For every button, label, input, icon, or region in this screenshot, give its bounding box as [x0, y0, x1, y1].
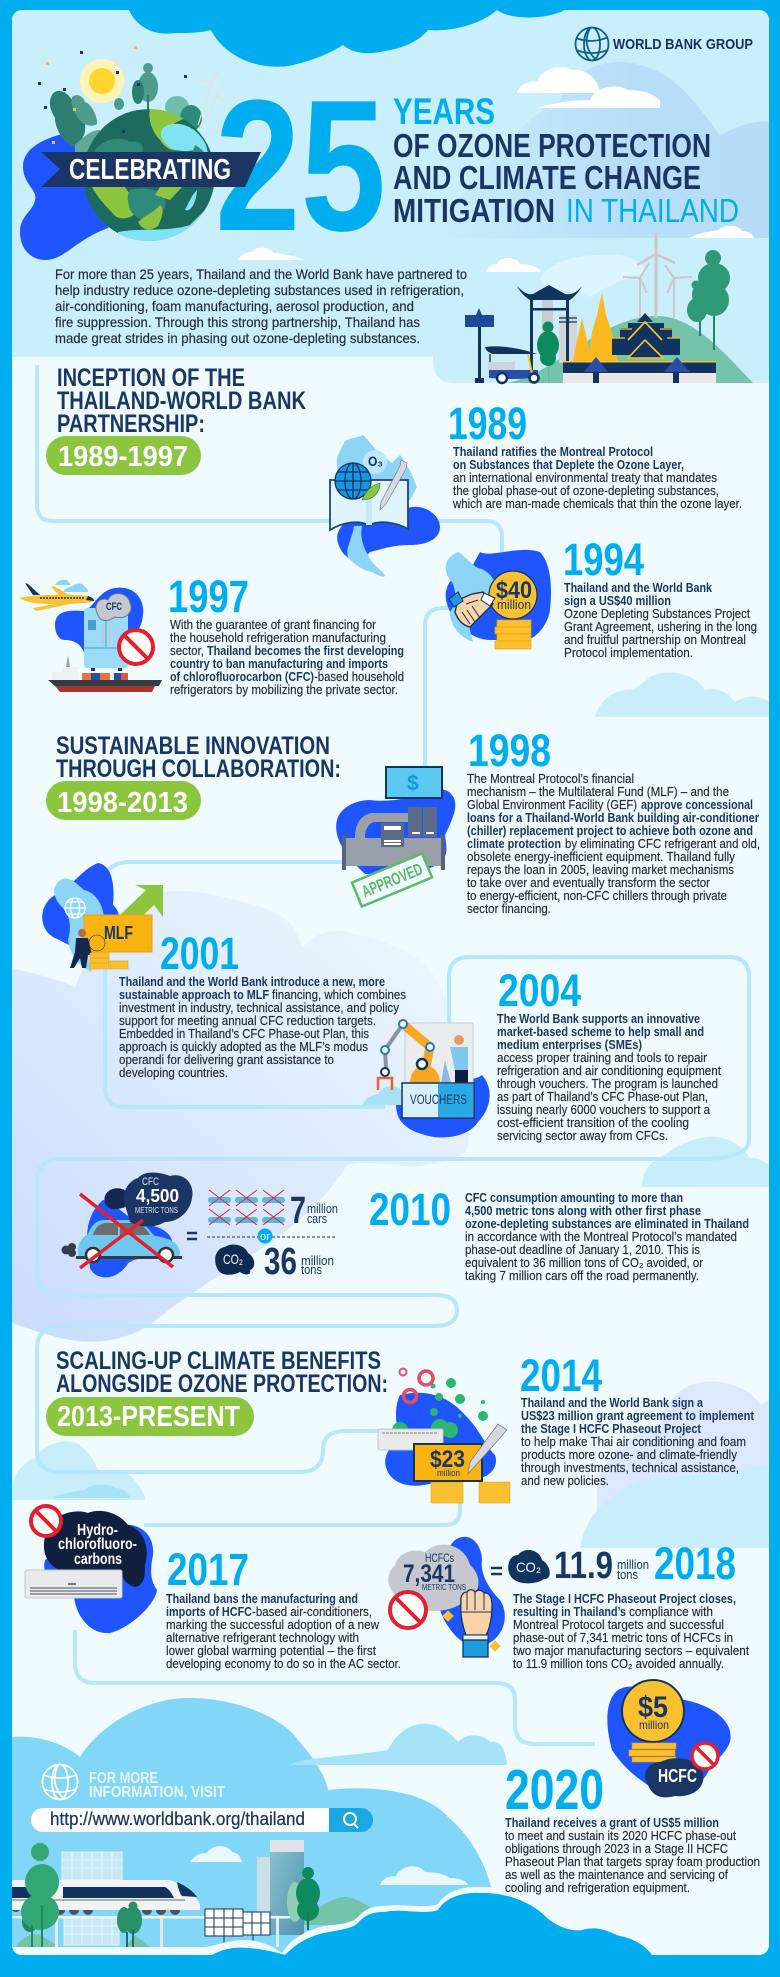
lavender cloud left	[12, 891, 469, 1342]
co2 figure: 11.9	[554, 1545, 613, 1587]
ship	[48, 655, 162, 692]
milestone 2018: compliance with	[629, 1605, 713, 1619]
equals	[491, 1568, 502, 1574]
tuk-tuk	[485, 346, 538, 383]
icon: vouchers	[363, 1020, 490, 1137]
milestone 1989: 1989	[448, 398, 527, 449]
cfc smoke: CFC	[106, 601, 122, 613]
sun	[80, 59, 124, 103]
milestone 2001	[119, 928, 406, 1080]
milestone 2018	[513, 1538, 749, 1671]
milestone 1989: an international environmental treaty that mandates	[453, 471, 717, 485]
green arrow	[118, 885, 163, 928]
cfc cloud: METRIC TONS	[135, 1206, 178, 1215]
city and skytrain illustration	[12, 1840, 468, 1947]
milestone 2018: phase-out of 7,341 metric tons of HCFCs in	[513, 1631, 733, 1645]
seven million cars: cars	[307, 1211, 327, 1226]
milestone 2014: and new policies.	[521, 1474, 609, 1488]
blob	[42, 863, 120, 953]
milestone 1998: Global Environment Facility (GEF)	[467, 798, 637, 812]
pen	[380, 460, 407, 510]
milestone 1998: repays the loan in 2005, leaving market mechanisms	[467, 863, 734, 877]
heading: scaling-up: SCALING-UP CLIMATE BENEFITS	[56, 1347, 381, 1375]
seven million cars	[208, 1190, 338, 1232]
top cloud	[129, 10, 565, 67]
milestone 2004: market-based scheme to help small and	[497, 1025, 704, 1039]
milestone 2004: access proper training and tools to repair	[497, 1051, 707, 1065]
blob	[385, 1393, 496, 1486]
small dark cloud	[104, 1188, 128, 1209]
green dots	[392, 1378, 488, 1438]
milestone 1997: refrigerators by mobilizing the private sector.	[170, 683, 398, 697]
milestone 2004	[497, 965, 721, 1143]
grant sign: million	[437, 1468, 460, 1478]
blob	[337, 507, 440, 560]
equals	[187, 1233, 197, 1239]
heading: inception: THAILAND-WORLD BANK	[57, 387, 306, 415]
heading: sustainable innovation: THROUGH COLLABORATION:	[56, 755, 341, 783]
pale cloud behind landmarks	[540, 254, 647, 297]
heading: sustainable innovation	[56, 732, 341, 783]
milestone 2010	[369, 1184, 749, 1283]
milestone 1997: the household refrigeration manufacturing	[170, 631, 386, 645]
no sign	[31, 1506, 61, 1536]
leaf	[362, 483, 380, 500]
heading: scaling-up	[56, 1347, 388, 1398]
hcfc label: chlorofluoro-	[58, 1536, 137, 1553]
milestone 2020	[505, 1758, 760, 1895]
milestone 2017: alternative refrigerant technology with	[166, 1631, 359, 1645]
milestone 2020: cooling and refrigeration equipment.	[505, 1881, 690, 1895]
milestone 2010: in accordance with the Montreal Protocol’s mandated	[465, 1230, 737, 1244]
cfc cloud: CFC	[142, 1176, 159, 1188]
earth illustration	[20, 46, 225, 260]
trees behind earth	[50, 63, 202, 152]
milestone 2020: as well as the maintenance and servicing of	[505, 1868, 728, 1882]
robot base	[378, 1020, 440, 1090]
coin: million	[639, 1718, 669, 1732]
red cross	[80, 1194, 173, 1268]
milestone 1997: With the guarantee of grant financing for	[170, 618, 376, 632]
intro text: For more than 25 years, Thailand and the World Bank have partnered to	[55, 266, 467, 282]
co2 36 million tons	[215, 1241, 334, 1283]
milestone 2014: to help make Thai air conditioning and foam	[521, 1435, 746, 1449]
milestone 2014: US$23 million grant agreement to implement	[521, 1409, 755, 1423]
blob	[55, 588, 143, 655]
train	[12, 1880, 294, 1947]
milestone 1997	[168, 571, 404, 697]
milestone 1997: 1997	[168, 571, 249, 622]
milestone 2004: medium enterprises (SMEs)	[497, 1038, 642, 1052]
blob	[396, 1075, 490, 1137]
lavender cloud right	[597, 1381, 769, 1510]
blob	[44, 1525, 157, 1633]
cloud right of 1994	[595, 672, 769, 717]
panel	[405, 1023, 473, 1083]
milestone 2010: CFC consumption amounting to more than	[465, 1191, 683, 1205]
milestone 2004: through vouchers. The program is launched	[497, 1077, 718, 1091]
milestone 2001: operandi for delivering grant assistance to	[119, 1053, 334, 1067]
date pill: 2013-present: 2013-PRESENT	[57, 1401, 240, 1433]
milestone 2001: Embedded in Thailand’s CFC Phase-out Plan, this	[119, 1027, 369, 1041]
title	[393, 91, 739, 229]
search bar: http://www.worldbank.org/thailand	[50, 1809, 305, 1829]
milestone 2018: two major manufacturing sectors – equivalent	[513, 1644, 749, 1658]
or divider: or	[260, 1231, 270, 1243]
ribbon: celebrating: CELEBRATING	[69, 154, 231, 186]
co2 figure	[508, 1545, 649, 1587]
milestone 1994: Thailand and the World Bank	[564, 581, 713, 595]
hills	[15, 1897, 395, 1947]
milestone 2001: financing, which combines	[272, 988, 406, 1002]
search icon	[344, 1813, 358, 1828]
cfc cloud: 4,500	[136, 1186, 179, 1206]
milestone 2004: 2004	[498, 965, 581, 1016]
tree right	[687, 250, 730, 350]
milestone 1997: sector,	[170, 644, 204, 658]
co2 figure: CO₂	[516, 1559, 541, 1575]
grey cloud	[388, 1545, 478, 1611]
grid building	[205, 1909, 270, 1944]
milestone 2001: investment in industry, technical assistance, and policy	[119, 1001, 400, 1015]
milestone 2010: 4,500 metric tons along with other first phase	[465, 1204, 701, 1218]
search bar	[31, 1808, 373, 1832]
visit text	[89, 1770, 225, 1801]
intro text: made great strides in phasing out ozone-depleting substances.	[55, 330, 420, 346]
milestone 1998: obsolete energy-inefficient equipment. Thailand fully	[467, 850, 736, 864]
cloud bottom left of section three	[12, 1441, 145, 1500]
visit text: INFORMATION, VISIT	[89, 1784, 225, 1801]
ozone label: O₃	[368, 453, 383, 469]
milestone 2001: sustainable approach to MLF	[119, 988, 269, 1002]
coin	[489, 571, 537, 619]
voucher: VOUCHERS	[410, 1091, 467, 1107]
or divider	[207, 1228, 335, 1244]
milestone 2020: obligations through 2023 in a Stage II HCFC	[505, 1842, 728, 1856]
milestone 2001: Thailand and the World Bank introduce a new, more	[119, 975, 385, 989]
blue blob	[20, 134, 150, 260]
milestone 2017: lower global warming potential – the first	[166, 1644, 376, 1658]
intro text	[55, 266, 467, 346]
title: IN THAILAND	[566, 192, 739, 229]
confetti dots	[38, 51, 187, 133]
blob	[446, 550, 551, 640]
milestone 2017: -based air-conditioners,	[252, 1605, 372, 1619]
milestone 2017: 2017	[167, 1544, 249, 1595]
hill	[507, 316, 753, 383]
background hills	[430, 62, 769, 238]
airplane	[19, 583, 94, 611]
milestone 2018: 2018	[654, 1538, 736, 1589]
no sign	[692, 1743, 718, 1769]
white foreground cloud	[12, 1887, 656, 1955]
coin	[622, 1680, 684, 1742]
robot arm	[385, 1024, 430, 1082]
car icons	[208, 1197, 285, 1223]
small cloud	[363, 1086, 403, 1105]
milestone 2014: Thailand and the World Bank sign a	[521, 1396, 704, 1410]
lamp post	[465, 308, 494, 383]
blue cloud right	[580, 1465, 769, 1548]
stacks	[542, 298, 577, 363]
co2 36 million tons: million	[301, 1253, 334, 1268]
title: AND CLIMATE CHANGE	[393, 159, 701, 196]
hcfc figures	[403, 1551, 466, 1592]
coin: $40	[496, 577, 532, 604]
milestone 2017: Thailand bans the manufacturing and	[166, 1592, 358, 1606]
hcfc figures: METRIC TONS	[422, 1583, 466, 1592]
milestone 1994: 1994	[563, 534, 644, 585]
title: MITIGATION	[393, 192, 555, 229]
milestone 2020: Thailand receives a grant of US$5 million	[505, 1816, 719, 1830]
date pill: 1998-2013: 1998-2013	[57, 787, 188, 819]
heading: scaling-up: ALONGSIDE OZONE PROTECTION:	[56, 1370, 388, 1398]
milestone 1989	[448, 398, 742, 511]
milestone 1998: climate protection	[467, 837, 561, 851]
wind turbines	[197, 68, 225, 130]
milestone 2018: to 11.9 million tons CO₂ avoided annually.	[513, 1657, 724, 1671]
bubbles	[400, 1368, 433, 1402]
milestone 2010: taking 7 million cars off the road permanently.	[465, 1269, 699, 1283]
milestone 1998: 1998	[468, 725, 551, 776]
icon: cfc refrigerator ban	[19, 580, 162, 692]
co2 36 million tons: 36	[264, 1241, 297, 1283]
seven million cars: 7	[290, 1190, 306, 1232]
blob	[607, 1687, 731, 1792]
milestone 2001: 2001	[160, 928, 239, 979]
hcfc label: carbons	[74, 1551, 122, 1568]
trees	[21, 1843, 320, 1947]
businessman	[70, 929, 92, 968]
blob	[436, 1537, 505, 1647]
icon: montreal protocol book	[330, 435, 440, 577]
milestone 2004: refrigeration and air conditioning equipment	[497, 1064, 721, 1078]
milestone 2017: imports of HCFC	[166, 1605, 252, 1619]
sparkles	[442, 1610, 501, 1652]
milestone 2004: cost-efficient transition of the cooling	[497, 1116, 689, 1130]
milestone 1994: sign a US$40 million	[564, 594, 671, 608]
milestone 2004: The World Bank supports an innovative	[497, 1012, 700, 1026]
man with tablet	[441, 1035, 468, 1083]
milestone 2004: issuing nearly 6000 vouchers to support a	[497, 1103, 710, 1117]
milestone 1989: the global phase-out of ozone-depleting substances,	[453, 484, 719, 498]
icon: hcfc ban	[25, 1506, 157, 1633]
milestone 2004: servicing sector away from CFCs.	[497, 1129, 668, 1143]
milestone 1997: Thailand becomes the first developing	[207, 644, 404, 658]
map of thailand	[446, 552, 498, 642]
coins	[89, 935, 128, 969]
milestone 2018: resulting in Thailand’s	[513, 1605, 626, 1619]
header background	[12, 10, 769, 383]
icon: cfc car equivalence	[62, 1172, 338, 1283]
intro text: fire suppression. Through this strong partnership, Thailand has	[55, 314, 420, 330]
logo text: WORLD BANK GROUP	[613, 36, 753, 53]
milestone 1998: The Montreal Protocol’s financial	[467, 772, 634, 786]
ozone bubble	[363, 450, 387, 474]
milestone 2014	[520, 1350, 755, 1488]
intro text: help industry reduce ozone-depleting substances used in refrigeration,	[55, 282, 464, 298]
mlf sign: MLF	[104, 923, 133, 943]
logo globe	[576, 28, 608, 60]
milestone 2020: to meet and sustain its 2020 HCFC phase-out	[505, 1829, 736, 1843]
icon: us$40 million grant	[446, 550, 551, 649]
milestone 2014: through investments, technical assistance,	[521, 1461, 739, 1475]
hcfc figures: 7,341	[403, 1560, 455, 1588]
bottom hill	[12, 1698, 500, 1955]
milestone 2001: developing countries.	[119, 1066, 228, 1080]
intro text: air-conditioning, foam manufacturing, aerosol production, and	[55, 298, 414, 314]
more information call to action	[31, 1764, 373, 1832]
book	[330, 480, 408, 530]
golden stupas	[573, 293, 618, 361]
milestone 2020: 2020	[505, 1758, 604, 1822]
cfc smoke	[96, 594, 131, 621]
white clouds in header	[239, 67, 754, 272]
coin stacks	[431, 1482, 510, 1503]
chiller	[342, 807, 445, 870]
milestone 2014: 2014	[520, 1350, 602, 1401]
co2 figure: million	[617, 1557, 649, 1572]
milestone 1998	[467, 725, 760, 916]
map of thailand	[337, 435, 417, 577]
coin: $5	[638, 1691, 668, 1724]
refrigerator	[84, 608, 128, 671]
white globe logo	[42, 1764, 78, 1800]
title: OF OZONE PROTECTION	[393, 127, 711, 164]
milestone 2010: equivalent to 36 million tons of CO₂ avoided, or	[465, 1256, 703, 1270]
milestone 2010: 2010	[369, 1184, 451, 1235]
exhaust	[62, 1243, 76, 1257]
blob	[336, 789, 455, 874]
icon: us$23 million grant	[378, 1368, 510, 1503]
milestone 1998: by eliminating CFC refrigerant and old,	[565, 837, 760, 851]
wind turbines	[623, 233, 692, 318]
cloud right of 2010	[642, 1137, 769, 1187]
milestone 2001: support for meeting annual CFC reduction targets.	[119, 1014, 376, 1028]
milestone 1998: to take over and eventually transform the sector	[467, 876, 710, 890]
icon: approved chiller loan	[336, 767, 455, 907]
earth	[83, 108, 215, 245]
hcfc label	[58, 1522, 137, 1568]
milestone 2004: as part of Thailand’s CFC Phase-out Plan,	[497, 1090, 708, 1104]
co2 36 million tons: tons	[301, 1262, 322, 1277]
coin: million	[497, 597, 531, 612]
timeline connector	[37, 365, 749, 1744]
globe	[335, 463, 371, 499]
small clouds	[55, 580, 88, 592]
monitor: $	[407, 772, 419, 795]
milestone 2017: marking the successful adoption of a new	[166, 1618, 380, 1632]
air conditioner	[25, 1570, 122, 1598]
milestone 2018: Montreal Protocol targets and successful	[513, 1618, 724, 1632]
temple	[563, 313, 716, 383]
milestone 2018: The Stage I HCFC Phaseout Project closes,	[513, 1592, 736, 1606]
coin stack	[629, 1743, 676, 1762]
hcfc figures: HCFCs	[425, 1551, 454, 1565]
handshake	[449, 592, 495, 627]
milestone 1997: of chlorofluorocarbon (CFC)	[170, 670, 314, 684]
milestone 1998: sector financing.	[467, 902, 551, 916]
tree left	[537, 322, 559, 383]
milestone 1989: on Substances that Deplete the Ozone Layer,	[453, 458, 684, 472]
milestone 1994: Ozone Depleting Substances Project	[564, 607, 750, 621]
grant sign: $23	[430, 1446, 465, 1473]
glass buildings	[62, 1852, 122, 1945]
milestone 1998: mechanism – the Multilateral Fund (MLF) – and the	[467, 785, 729, 799]
milestone 2014: products more ozone- and climate-friendly	[521, 1448, 738, 1462]
milestone 2020: Phaseout Plan that targets spray foam production	[505, 1855, 760, 1869]
icon: hcfc phase-out	[388, 1537, 649, 1657]
heading: inception: INCEPTION OF THE	[57, 364, 245, 392]
no sign	[390, 1592, 426, 1628]
milestone 1998: approve concessional	[641, 798, 753, 812]
hcfc label: Hydro-	[77, 1522, 118, 1539]
thai landmarks illustration	[465, 233, 753, 383]
cfc cloud	[124, 1172, 193, 1226]
co2 36 million tons: CO₂	[223, 1251, 243, 1267]
car	[76, 1220, 182, 1262]
milestone 1994: Protocol implementation.	[564, 646, 693, 660]
title: YEARS	[393, 91, 495, 132]
heading: inception	[57, 364, 306, 438]
pen	[468, 1424, 507, 1474]
bottom cloud	[212, 1893, 652, 1955]
milestone 1994	[563, 534, 757, 660]
map of thailand	[54, 878, 104, 972]
fist	[461, 1590, 492, 1657]
date pill: 1989-1997: 1989-1997	[58, 441, 188, 473]
seven million cars: million	[307, 1201, 338, 1216]
heading: inception: PARTNERSHIP:	[57, 410, 205, 438]
milestone 1989: which are man-made chemicals that thin the ozone layer.	[452, 497, 742, 511]
milestone 1994: Grant Agreement, ushering in the long	[564, 620, 757, 634]
co2 figure: tons	[617, 1567, 638, 1582]
no sign	[119, 630, 153, 664]
big number 25: 25	[215, 61, 386, 270]
milestone 2017: developing economy to do so in the AC sector.	[166, 1657, 401, 1671]
milestone 2010: phase-out deadline of January 1, 2010. This is	[465, 1243, 700, 1257]
milestone 1989: Thailand ratifies the Montreal Protocol	[453, 445, 653, 459]
icon: mlf financing	[42, 863, 163, 972]
coin stack	[495, 620, 531, 649]
milestone 1997: country to ban manufacturing and imports	[170, 657, 388, 671]
world bank group logo	[576, 28, 753, 60]
background clouds	[12, 672, 769, 1955]
hcfc cloud: HCFC	[658, 1766, 697, 1786]
air conditioner	[378, 1429, 443, 1450]
milestone 2001: approach is quickly adopted as the MLF’s modus	[119, 1040, 368, 1054]
office towers	[257, 1840, 304, 1935]
heading: sustainable innovation: SUSTAINABLE INNOVATION	[56, 732, 330, 760]
visit text: FOR MORE	[89, 1770, 158, 1787]
blob	[87, 1200, 172, 1277]
grant sign	[414, 1444, 482, 1481]
globe	[65, 898, 85, 918]
cloud on bottom hill	[289, 1724, 507, 1765]
dark cloud	[44, 1511, 147, 1587]
milestone 2017	[166, 1544, 401, 1671]
milestone 2014: the Stage I HCFC Phaseout Project	[521, 1422, 702, 1436]
milestone 1994: and fruitful partnership on Montreal	[564, 633, 746, 647]
giant swing	[517, 285, 582, 381]
approved stamp: APPROVED	[359, 859, 425, 901]
milestone 1997: -based household	[314, 670, 404, 684]
milestone 1998: to energy-efficient, non-CFC chillers through private	[467, 889, 727, 903]
white clouds	[190, 1846, 468, 1885]
icon: us$5 million hcfc grant	[607, 1680, 731, 1797]
